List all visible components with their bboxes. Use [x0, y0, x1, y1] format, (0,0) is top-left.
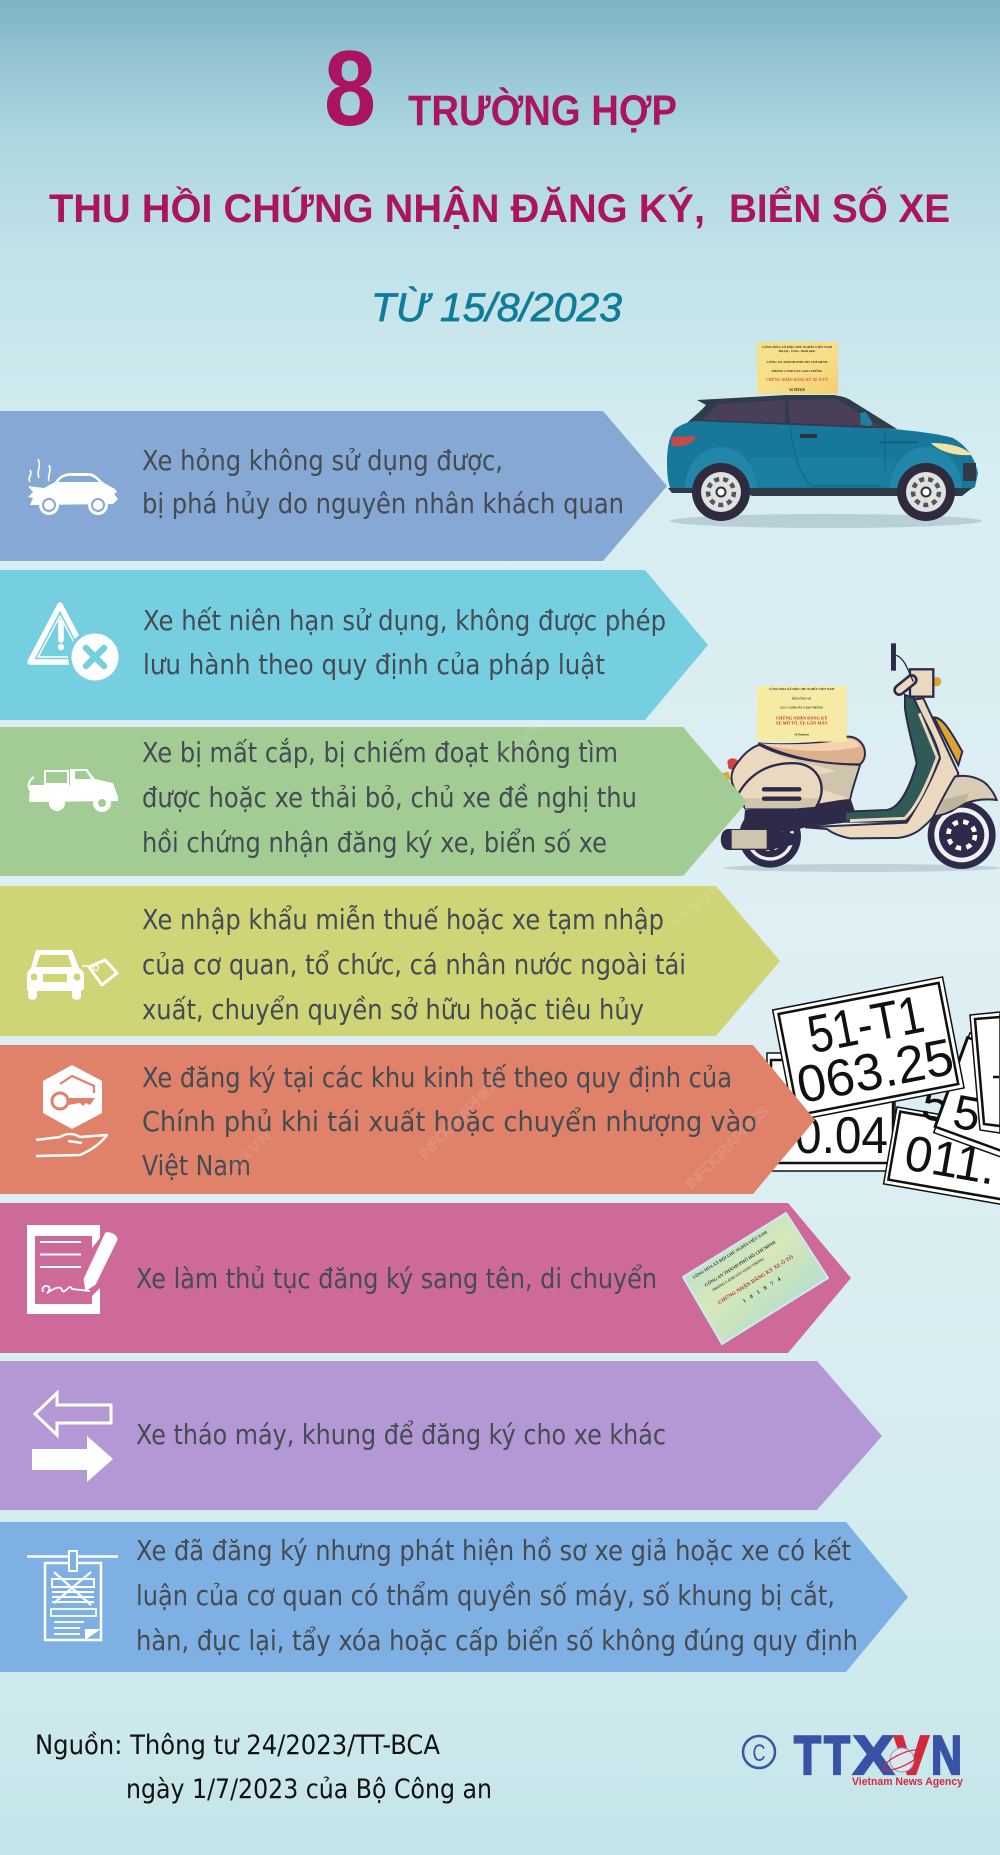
registration certificate on car: [757, 342, 838, 394]
watermarks: INFOGRAPHICS: [416, 1073, 506, 1163]
text: case 3: [142, 736, 637, 859]
plate: 011: [884, 1070, 1000, 1207]
car door details: [790, 424, 885, 486]
icon: car with price tag: [27, 950, 117, 1000]
arrow 5: [0, 1045, 815, 1194]
car roof: [687, 395, 897, 429]
car front wheel: [897, 463, 955, 521]
text: case 6: Xe làm thủ tục đăng ký sang tên, di chuyển: [136, 1263, 657, 1295]
text: case 1: bị phá hủy do nguyên nhân khách quan: [142, 488, 624, 520]
illustration: licence plates: 5: [949, 1086, 985, 1142]
registration certificate on car: PHÒNG CẢNH SÁT GIAO THÔNG: [772, 368, 823, 373]
text: case 5: Chính phủ khi tái xuất hoặc chuyển nhượng vào: [142, 1106, 757, 1138]
title: [49, 28, 950, 330]
illustration: licence plates: [767, 977, 1000, 1207]
registration certificate on car: CỘNG HÒA XÃ HỘI CHỦ NGHĨA VIỆT NAM: [762, 344, 833, 349]
registration card on arrow 6: 1 0 1 8 7 4: [742, 1275, 784, 1305]
watermarks: [221, 718, 773, 1193]
agency wordmark: T: [794, 1724, 821, 1786]
globe: [881, 1746, 923, 1774]
panel: case 5: [0, 1045, 815, 1194]
scooter grille: [764, 789, 799, 799]
scooter shadow: [723, 864, 1000, 872]
car rear wheel: [692, 463, 750, 521]
source note: Nguồn: Thông tư 24/2023/TT-BCA: [35, 1730, 440, 1761]
car windows: [703, 400, 785, 423]
car shadow: [670, 514, 982, 528]
watermarks: TTXVN: [671, 878, 725, 933]
scooter glove box: [934, 717, 962, 765]
scooter front wheel: [928, 801, 996, 869]
arrow 2: [0, 570, 708, 720]
text: case 2: [143, 605, 666, 681]
copyright mark: C: [752, 1740, 766, 1767]
registration certificate on car: Độc lập - Tự do - Hạnh phúc: [779, 349, 816, 353]
text: case 8: luận của cơ quan có thẩm quyền số máy, số khung bị cắt,: [136, 1579, 835, 1612]
icon: damaged car: [28, 459, 118, 515]
scooter taillight: [727, 758, 738, 771]
plate: vertical: [970, 1012, 1000, 1133]
text: case 5: Xe đăng ký tại các khu kinh tế theo quy định của: [142, 1062, 732, 1094]
scooter certificate: BỘ CÔNG AN: [792, 695, 812, 700]
main plate: 51-T1 063.25: 51-T1: [803, 985, 929, 1065]
agency wordmark: X: [853, 1724, 894, 1786]
scooter leg shield: [805, 698, 958, 838]
source note: ngày 1/7/2023 của Bộ Công an: [126, 1774, 492, 1805]
text: case 3: Xe bị mất cắp, bị chiếm đoạt không tìm: [142, 736, 618, 769]
title line 2: [49, 184, 950, 231]
main plate: 51-T1 063.25: 063.25: [792, 1028, 958, 1115]
arrow 4: [0, 886, 780, 1036]
panel: case 3: [0, 727, 747, 876]
panel: case 8: [0, 1522, 908, 1672]
icon: two opposite arrows: [32, 1393, 113, 1482]
panel: case 1: [0, 411, 667, 561]
registration card on arrow 6: CỘNG HÒA XÃ HỘI CHỦ NGHĨA VIỆT NAM: [692, 1230, 768, 1280]
icon: warning and cross: [30, 605, 122, 684]
icon: clipped cancelled document: [27, 1551, 118, 1640]
registration card on arrow 6: [683, 1213, 828, 1344]
illustration: scooter with certificate: [721, 643, 1000, 872]
date subtitle: TỪ 15/8/2023: [371, 285, 622, 330]
car body: [667, 421, 978, 494]
arrow 3: [0, 727, 747, 876]
scooter rear wheel: [739, 806, 801, 868]
arrow 6: [0, 1203, 851, 1353]
scooter rear body: [731, 745, 860, 808]
text: case 1: Xe hỏng không sử dụng được,: [142, 445, 503, 477]
scooter certificate: CỘNG HÒA XÃ HỘI CHỦ NGHĨA VIỆT NAM: [769, 686, 834, 691]
scooter certificate: CỤC CẢNH SÁT GIAO THÔNG: [780, 705, 824, 710]
text: case 1: [142, 445, 624, 520]
copyright mark: [743, 1736, 775, 1768]
logo: TTXVN: [743, 1724, 964, 1788]
plate behind: 0.04: [767, 1053, 895, 1171]
arrow 8: [0, 1522, 908, 1672]
agency wordmark: N: [931, 1724, 962, 1786]
scooter strip line: [850, 713, 937, 821]
arrow 1: [0, 411, 667, 561]
scooter exhaust: [721, 829, 800, 850]
icon: signed document with pen: [27, 1225, 118, 1314]
title number 8: 8: [324, 28, 376, 148]
icon: pickup truck with safe: [29, 769, 118, 812]
registration card on arrow 6: PHÒNG CẢNH SÁT GIAO THÔNG: [711, 1256, 765, 1292]
registration certificate on car: CHỨNG NHẬN ĐĂNG KÝ XE Ô TÔ: [766, 377, 828, 382]
watermarks: TTXVN: [491, 718, 545, 773]
agency wordmark: T: [824, 1724, 850, 1786]
scooter green panel: [845, 695, 940, 822]
text: case 3: hồi chứng nhận đăng ký xe, biển số xe: [142, 827, 607, 859]
scooter certificate: XE MÔ TÔ, XE GẮN MÁY: [776, 719, 829, 725]
text: case 8: [136, 1535, 858, 1657]
text: case 3: được hoặc xe thải bỏ, chủ xe đề nghị thu: [142, 782, 637, 814]
watermarks: INFOGRAPHICS: [683, 1103, 773, 1193]
scooter dark underbody: [743, 797, 855, 832]
car lights: [671, 436, 696, 446]
panel: case 2: [0, 570, 708, 720]
scooter certificate: CHỨNG NHẬN ĐĂNG KÝ: [776, 715, 828, 720]
registration card on arrow 6: CHỨNG NHẬN ĐĂNG KÝ XE Ô TÔ: [716, 1253, 795, 1306]
car mirror: [860, 412, 872, 426]
text: case 2: lưu hành theo quy định của pháp luật: [143, 649, 605, 681]
panel: case 6: [0, 1203, 851, 1353]
text: case 4: xuất, chuyển quyền sở hữu hoặc tiêu hủy: [142, 994, 644, 1026]
panel: case 7: [0, 1361, 882, 1510]
illustration: blue car with certificate: [667, 342, 982, 528]
plate: 011: 011.: [901, 1125, 1000, 1196]
scooter certificate: Số (Number): [794, 733, 809, 736]
main plate: 51-T1 063.25: [773, 977, 964, 1121]
text: case 4: của cơ quan, tổ chức, cá nhân nước ngoài tái: [142, 949, 686, 981]
registration certificate on car: Số 018320: [789, 388, 805, 392]
scooter seat: [758, 737, 865, 764]
text: case 7: Xe tháo máy, khung để đăng ký cho xe khác: [136, 1419, 666, 1451]
text: case 5: [142, 1062, 757, 1182]
car rocker strip: [668, 488, 972, 496]
registration card on arrow 6: CÔNG AN THÀNH PHỐ HỒ CHÍ MINH: [704, 1239, 777, 1288]
plate behind: 0.04: 0.04: [795, 1107, 888, 1165]
agency wordmark: V: [894, 1724, 929, 1786]
registration certificate on car: CÔNG AN THÀNH PHỐ HỒ CHÍ MINH: [767, 359, 828, 364]
title line 1: TRƯỜNG HỢP: [408, 86, 677, 135]
watermarks: TTXVN: [221, 1128, 275, 1183]
text: case 5: Việt Nam: [142, 1150, 251, 1182]
text: case 2: Xe hết niên hạn sử dụng, không được phép: [143, 605, 666, 637]
arrow 7: [0, 1361, 882, 1510]
scooter side panel: [738, 763, 822, 807]
scooter certificate: [757, 686, 847, 742]
plate: 5 tilted: [933, 1033, 1000, 1170]
text: case 4: [142, 903, 686, 1026]
plate: 011: 5: [918, 1074, 955, 1134]
text: case 8: hàn, đục lại, tẩy xóa hoặc cấp biển số không đúng quy định: [136, 1625, 858, 1657]
panel: case 4: [0, 886, 780, 1036]
icon: key in hexagon over hand: [36, 1065, 107, 1156]
scooter front fender: [933, 776, 997, 817]
title line 2: THU HỒI CHỨNG NHẬN ĐĂNG KÝ,: [49, 185, 705, 231]
source note: [35, 1730, 492, 1805]
agency wordmark: [794, 1724, 962, 1786]
scooter handlebars: [891, 643, 941, 697]
text: case 4: Xe nhập khẩu miễn thuế hoặc xe tạm nhập: [142, 903, 664, 936]
title line 2: BIỂN SỐ XE: [729, 184, 950, 231]
text: case 8: Xe đã đăng ký nhưng phát hiện hồ sơ xe giả hoặc xe có kết: [136, 1535, 851, 1567]
agency tagline: Vietnam News Agency: [852, 1776, 964, 1788]
